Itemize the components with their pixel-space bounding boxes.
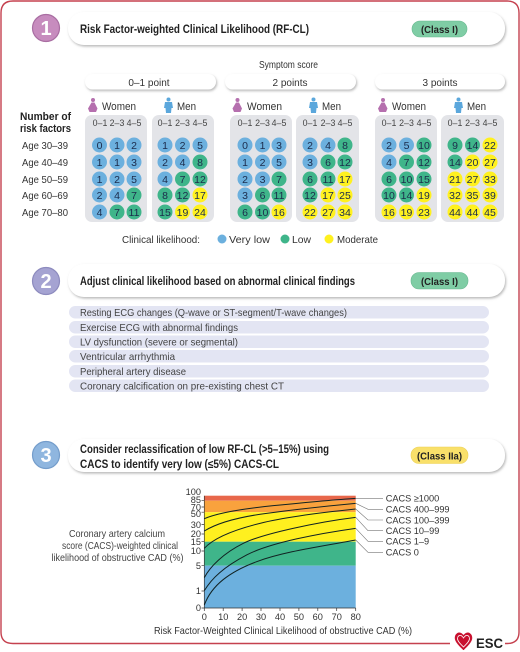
table: 2 points women: 3 xyxy=(242,190,248,202)
table: 2 points men: 8 xyxy=(342,140,348,152)
row labels xyxy=(20,111,71,219)
step 2 header bar: Adjust clinical likelihood based on abnormal clinical findings xyxy=(80,276,355,288)
curve leader lines and CACS labels xyxy=(356,494,450,558)
y-axis tick labels: 1 xyxy=(196,586,201,596)
table: 0-1 point men: 12 xyxy=(177,190,188,202)
table: 2 points men: 11 xyxy=(323,174,334,186)
list of abnormal clinical findings xyxy=(69,306,489,392)
y-axis title xyxy=(52,528,184,564)
panel: step 2 adjust clinical likelihood xyxy=(32,264,505,392)
table: 3 points men: 4–5 xyxy=(483,118,497,128)
table: 3 points women: 2 xyxy=(386,140,392,152)
y-axis tick labels: 100 xyxy=(186,487,201,497)
table: 3 points men: 0–1 xyxy=(448,118,462,128)
table: 0-1 point men: 2 xyxy=(180,140,186,152)
table: 0-1 point women: 7 xyxy=(114,207,120,219)
women and men labels: Women xyxy=(102,101,136,113)
table: 0-1 point men xyxy=(152,115,214,222)
step 2 badge: 2 xyxy=(40,271,52,293)
y-axis tick labels: 70 xyxy=(191,502,201,512)
class IIa badge: (Class IIa) xyxy=(417,450,462,462)
table: 0-1 point men: 19 xyxy=(177,207,188,219)
table: 0-1 point men: 1 xyxy=(162,140,168,152)
table: 3 points women: 0–1 xyxy=(382,118,396,128)
step 3 header bar: CACS to identify very low (≤5%) CACS-CL xyxy=(80,459,279,471)
table: 3 points men: 22 xyxy=(484,140,496,152)
table: 3 points men: 32 xyxy=(449,190,461,202)
table: 3 points men: 14 xyxy=(449,157,461,169)
step 2 header bar xyxy=(68,264,505,297)
table: 3 points women: 19 xyxy=(401,207,412,219)
table: 2 points women: 7 xyxy=(276,174,282,186)
table: 3 points men: 44 xyxy=(449,207,461,219)
list of abnormal clinical findings: Coronary calcification on pre-existing chest CT xyxy=(80,380,285,392)
curve leader lines and CACS labels: CACS 10–99 xyxy=(386,526,439,536)
table: 2 points men: 0–1 xyxy=(303,118,317,128)
step 3 header bar: Consider reclassification of low RF-CL (>5–15%) using xyxy=(80,444,329,456)
x-axis tick labels: 20 xyxy=(237,612,247,622)
y-axis tick labels: 20 xyxy=(191,529,201,539)
table: 2 points men: 12 xyxy=(339,157,351,169)
step 3 badge: 3 xyxy=(40,445,52,467)
table: 2 points women: 4–5 xyxy=(272,118,286,128)
symptom score headers: 2 points xyxy=(272,78,308,89)
table: 2 points men: 17 xyxy=(322,190,334,202)
table: 3 points men: 2–3 xyxy=(465,118,480,128)
y-axis title: Coronary artery calcium xyxy=(69,528,165,540)
row labels: Age 40–49 xyxy=(22,157,68,169)
table: 3 points women: 2–3 xyxy=(399,118,414,128)
x-axis title: Risk Factor-Weighted Clinical Likelihood of obstructive CAD (%) xyxy=(154,625,412,637)
symptom score headers: 3 points xyxy=(422,78,458,89)
step 1 badge xyxy=(32,14,60,42)
table: 3 points women: 10 xyxy=(401,174,412,186)
symptom score headers xyxy=(85,74,505,90)
table: 0-1 point men: 5 xyxy=(197,140,203,152)
chart: CACS-weighted vs RF-weighted likelihood xyxy=(186,487,361,622)
table: 0-1 point women: 5 xyxy=(131,174,137,186)
table: 0-1 point women: 1 xyxy=(114,140,120,152)
table: 3 points women: 14 xyxy=(401,190,412,202)
table: 2 points women: 2 xyxy=(260,157,266,169)
table: 0-1 point women: 4 xyxy=(114,190,120,202)
x-axis tick labels xyxy=(202,612,361,622)
table: 3 points men: 27 xyxy=(467,174,478,186)
table: 0-1 point women: 2 xyxy=(97,190,103,202)
ESC logo: ESC xyxy=(476,636,503,651)
step 3 badge xyxy=(32,442,60,468)
table: 3 points men: 35 xyxy=(467,190,478,202)
table: 0-1 point women: 2 xyxy=(131,140,137,152)
table: 3 points women: 4 xyxy=(386,157,392,169)
row labels: Age 70–80 xyxy=(22,207,68,219)
table: 0-1 point men: 15 xyxy=(159,207,171,219)
table: 3 points women: 23 xyxy=(418,207,430,219)
table: 0-1 point men: 12 xyxy=(194,174,206,186)
table: 3 points women: 5 xyxy=(404,140,410,152)
table: 3 points men: 27 xyxy=(484,157,496,169)
table: 0-1 point men: 4 xyxy=(162,174,168,186)
row labels: risk factors xyxy=(20,123,71,135)
table: 0-1 point men: 24 xyxy=(194,207,206,219)
table: 2 points men: 6 xyxy=(325,157,331,169)
table: 3 points women: 12 xyxy=(418,157,430,169)
curve leader lines and CACS labels: CACS 0 xyxy=(386,548,419,558)
list of abnormal clinical findings: Resting ECG changes (Q-wave or ST-segment/T-wave changes) xyxy=(80,307,347,319)
y-axis tick labels: 30 xyxy=(191,520,201,530)
table: 2 points women: 3 xyxy=(276,140,282,152)
list of abnormal clinical findings: Peripheral artery disease xyxy=(80,366,186,378)
table: 0-1 point men: 4–5 xyxy=(193,118,207,128)
table: 3 points women: 4–5 xyxy=(417,118,431,128)
table: 0-1 point men: 0–1 xyxy=(158,118,172,128)
legend: clinical likelihood: Clinical likelihood: xyxy=(122,234,200,246)
table: 0-1 point women: 2 xyxy=(114,174,120,186)
table: 0-1 point women: 1 xyxy=(114,157,120,169)
x-axis tick labels: 60 xyxy=(313,612,323,622)
table: 2 points men: 17 xyxy=(339,174,351,186)
table: 3 points men xyxy=(441,115,504,222)
curve leader lines and CACS labels: CACS 100–399 xyxy=(386,515,450,525)
row labels: Age 50–59 xyxy=(22,174,68,186)
table: 0-1 point men: 8 xyxy=(197,157,203,169)
table: 3 points women: 10 xyxy=(418,140,430,152)
y-axis title: likelihood of obstructive CAD (%) xyxy=(52,552,184,564)
x-axis tick labels: 70 xyxy=(332,612,342,622)
table: 2 points women: 10 xyxy=(257,207,268,219)
women and men labels: Women xyxy=(247,101,282,113)
table: 3 points women: 7 xyxy=(404,157,410,169)
table: 0-1 point women: 4–5 xyxy=(127,118,141,128)
table: 0-1 point women: 0 xyxy=(97,140,103,152)
list of abnormal clinical findings: LV dysfunction (severe or segmental) xyxy=(80,336,238,348)
x-axis tick labels: 0 xyxy=(202,612,207,622)
table: 3 points men: 21 xyxy=(449,174,461,186)
x-axis tick labels: 50 xyxy=(294,612,304,622)
table: 2 points men: 4–5 xyxy=(338,118,352,128)
table: 0-1 point women: 2–3 xyxy=(110,118,124,128)
women and men labels: Men xyxy=(177,101,196,113)
y-axis tick labels: 10 xyxy=(191,546,201,556)
women and men labels: Men xyxy=(322,101,341,113)
x-axis tick labels: 30 xyxy=(256,612,266,622)
x-axis tick labels: 40 xyxy=(275,612,285,622)
table: 0-1 point men: 4 xyxy=(180,157,186,169)
table: 0-1 point men: 8 xyxy=(162,190,168,202)
table: 2 points women: 2–3 xyxy=(255,118,270,128)
women and men labels xyxy=(88,98,486,113)
table: 2 points men: 27 xyxy=(322,207,334,219)
table: 0-1 point men: 17 xyxy=(194,190,206,202)
step 2 badge xyxy=(32,268,60,294)
table: 0-1 point women: 0–1 xyxy=(93,118,107,128)
ESC logo xyxy=(455,633,503,651)
step 1 badge: 1 xyxy=(40,18,52,40)
y-axis tick labels: 50 xyxy=(191,509,201,519)
table: 0-1 point women: 7 xyxy=(131,190,137,202)
table: 0-1 point men: 2–3 xyxy=(175,118,190,128)
table: 0-1 point women: 11 xyxy=(129,207,140,219)
table: 2 points women: 0–1 xyxy=(238,118,252,128)
table: 0-1 point men: 7 xyxy=(180,174,186,186)
legend: clinical likelihood: Very low xyxy=(229,234,270,246)
table: 2 points women: 6 xyxy=(242,207,248,219)
table: 3 points men: 33 xyxy=(484,174,496,186)
y-axis tick labels: 85 xyxy=(191,495,201,505)
table: 0-1 point men: 2 xyxy=(162,157,168,169)
table: 2 points women: 0 xyxy=(242,140,248,152)
curve leader lines and CACS labels: CACS 400–999 xyxy=(386,504,450,514)
legend: clinical likelihood xyxy=(122,234,378,246)
table: 2 points men: 6 xyxy=(307,174,313,186)
table: 2 points men: 34 xyxy=(339,207,351,219)
table: 0-1 point women: 3 xyxy=(131,157,137,169)
y-axis tick labels: 5 xyxy=(196,561,201,571)
list of abnormal clinical findings: Ventricular arrhythmia xyxy=(80,351,175,363)
class I badge: (Class I) xyxy=(421,276,458,288)
table: 3 points men: 20 xyxy=(467,157,478,169)
table: 0-1 point women xyxy=(85,115,147,222)
step 3 header bar xyxy=(68,439,505,472)
table: 2 points women: 6 xyxy=(260,190,266,202)
x-axis tick labels: 10 xyxy=(218,612,228,622)
table: 2 points men: 2 xyxy=(307,140,313,152)
table: 2 points women: 3 xyxy=(260,174,266,186)
axes and ticks xyxy=(202,496,356,611)
table: 3 points women: 10 xyxy=(383,190,395,202)
table: 2 points women xyxy=(230,115,292,222)
curve leader lines and CACS labels: CACS ≥1000 xyxy=(386,494,439,504)
CACS curves xyxy=(204,498,356,605)
symptom score label: Symptom score xyxy=(259,60,318,71)
y-axis title: score (CACS)-weighted clinical xyxy=(62,540,178,552)
panel: step 3 CACS reclassification xyxy=(32,439,505,637)
table: 3 points men: 44 xyxy=(467,207,478,219)
table: 0-1 point women: 4 xyxy=(97,207,103,219)
class I badge xyxy=(412,21,467,37)
table: 2 points women: 1 xyxy=(260,140,266,152)
table: 3 points men: 39 xyxy=(484,190,496,202)
row labels: Age 60–69 xyxy=(22,190,68,202)
table: 2 points women: 2 xyxy=(242,174,248,186)
table: 0-1 point women: 1 xyxy=(97,157,103,169)
table: 3 points women: 6 xyxy=(386,174,392,186)
table: 3 points men: 14 xyxy=(467,140,478,152)
table: 2 points men: 4 xyxy=(325,140,331,152)
table: 2 points men: 12 xyxy=(304,190,316,202)
class I badge: (Class I) xyxy=(421,24,458,36)
curve leader lines and CACS labels: CACS 1–9 xyxy=(386,536,429,546)
table: 3 points women: 16 xyxy=(383,207,395,219)
list of abnormal clinical findings: Exercise ECG with abnormal findings xyxy=(80,322,238,334)
y-axis tick labels: 15 xyxy=(191,537,201,547)
table: 3 points women xyxy=(375,115,437,222)
legend: clinical likelihood: Low xyxy=(292,234,311,246)
table: 2 points men: 22 xyxy=(304,207,316,219)
table: 3 points men: 45 xyxy=(484,207,496,219)
table: 3 points women: 19 xyxy=(418,190,430,202)
table: 2 points men: 3 xyxy=(307,157,313,169)
step 1 header bar xyxy=(68,12,505,45)
row labels: Number of xyxy=(20,111,71,123)
row labels: Age 30–39 xyxy=(22,140,68,152)
symptom score headers: 0–1 point xyxy=(128,78,170,89)
class IIa badge xyxy=(411,447,468,464)
women and men labels: Women xyxy=(392,101,426,113)
panel: step 1 risk factor-weighted clinical likelihood xyxy=(20,12,505,246)
table: 2 points men: 2–3 xyxy=(321,118,335,128)
table: 2 points men xyxy=(296,115,359,222)
table: 2 points women: 16 xyxy=(273,207,285,219)
class I badge xyxy=(411,272,468,289)
table: 2 points women: 1 xyxy=(242,157,248,169)
table: 2 points men: 25 xyxy=(339,190,351,202)
step 1 header bar: Risk Factor-weighted Clinical Likelihood (RF-CL) xyxy=(80,24,309,36)
table: 2 points women: 11 xyxy=(274,190,285,202)
table: 3 points men: 9 xyxy=(452,140,458,152)
x-axis tick labels: 80 xyxy=(351,612,361,622)
y-axis tick labels xyxy=(186,487,201,613)
legend: clinical likelihood: Moderate xyxy=(337,234,378,246)
table: 0-1 point women: 1 xyxy=(97,174,103,186)
y-axis tick labels: 0 xyxy=(196,603,201,613)
women and men labels: Men xyxy=(467,101,486,113)
table: 3 points women: 15 xyxy=(418,174,430,186)
table: 2 points women: 5 xyxy=(276,157,282,169)
